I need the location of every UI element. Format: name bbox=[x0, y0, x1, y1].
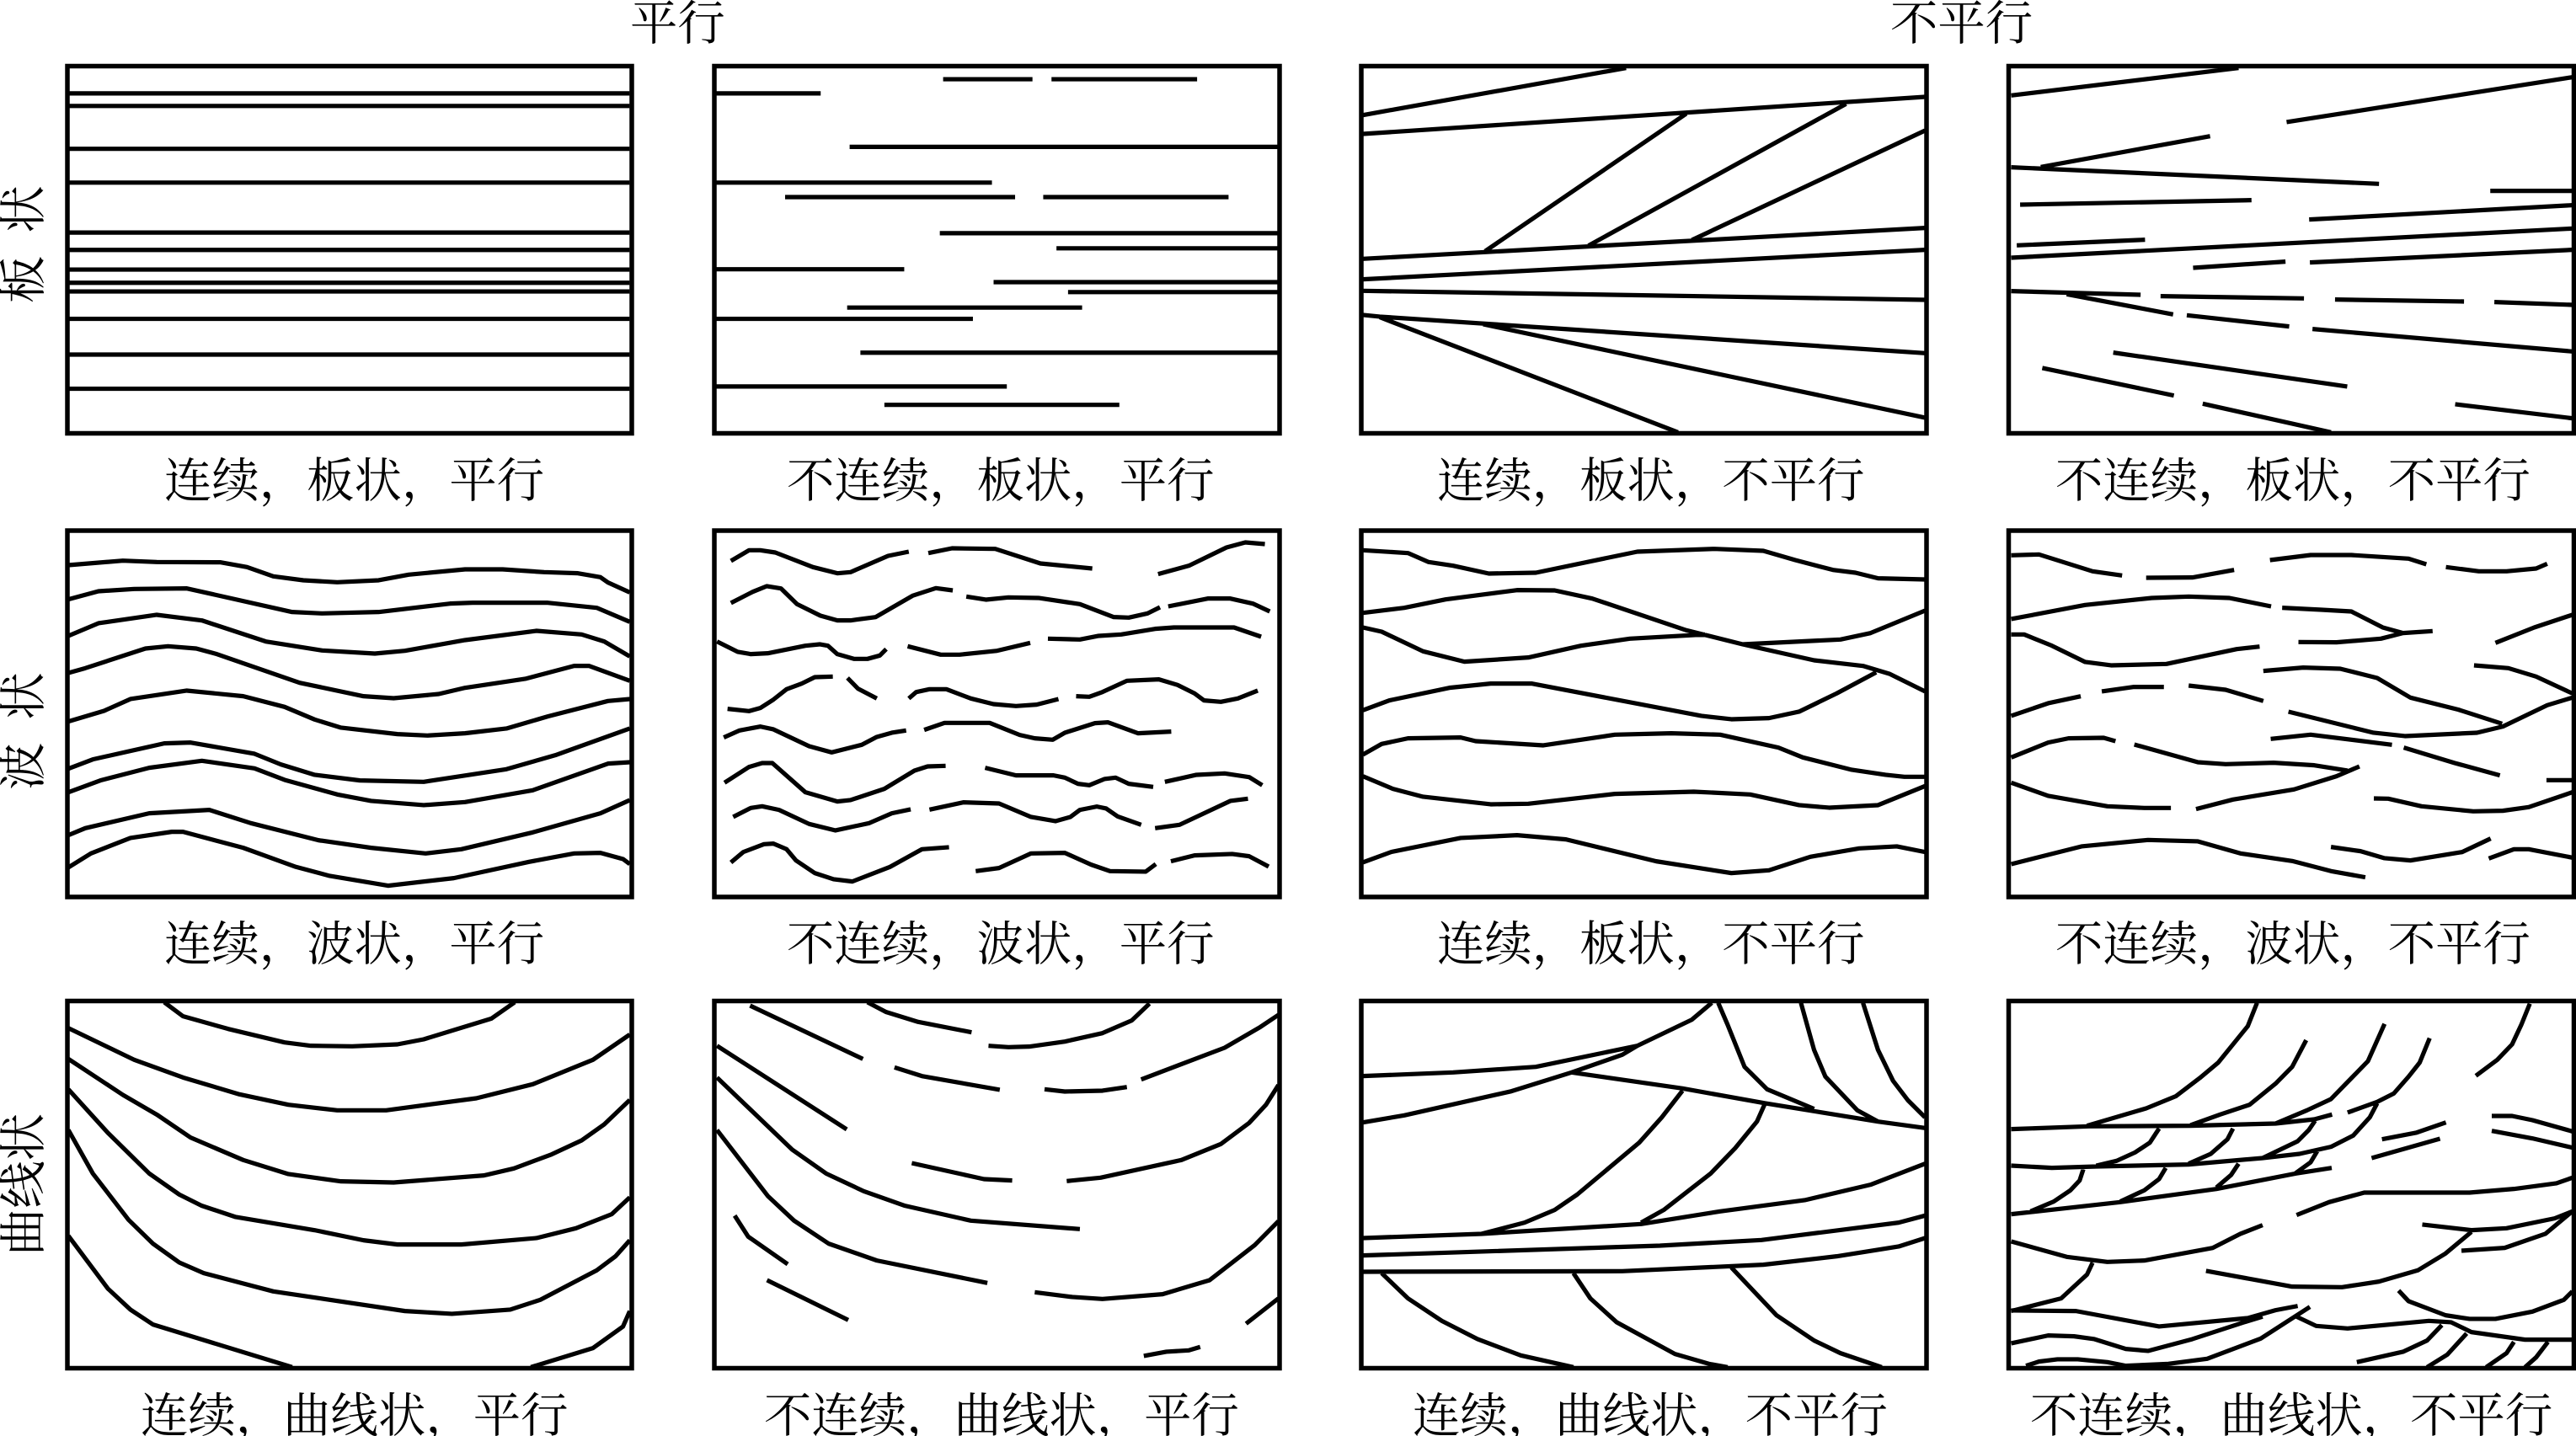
frame bbox=[714, 1001, 1280, 1368]
strata lines bbox=[717, 1002, 1279, 1356]
strata lines bbox=[717, 542, 1269, 882]
frame bbox=[2008, 66, 2574, 433]
panel: continuous wavy non-parallel bbox=[1361, 531, 1927, 897]
strata lines bbox=[1363, 68, 1925, 432]
strata lines bbox=[2012, 68, 2573, 432]
frame bbox=[714, 531, 1280, 897]
frame bbox=[2008, 1001, 2574, 1368]
panel: continuous curved parallel bbox=[67, 1001, 632, 1368]
panel: continuous curved non-parallel bbox=[1361, 1001, 1927, 1368]
strata lines bbox=[716, 79, 1278, 405]
strata lines bbox=[68, 561, 630, 886]
frame bbox=[67, 531, 632, 897]
caption: 不连续，板状，平行 bbox=[787, 456, 1215, 508]
panel: discontinuous curved parallel bbox=[714, 1001, 1280, 1368]
panel: discontinuous tabular parallel bbox=[714, 66, 1280, 433]
caption: 连续，板状，平行 bbox=[164, 456, 544, 508]
frame bbox=[67, 1001, 632, 1368]
strata lines bbox=[2012, 1003, 2573, 1367]
strata lines bbox=[1363, 549, 1925, 873]
panel: continuous tabular parallel bbox=[67, 66, 632, 433]
panel: discontinuous wavy parallel bbox=[714, 531, 1280, 897]
frame bbox=[714, 66, 1280, 433]
frame bbox=[67, 66, 632, 433]
panel: continuous tabular non-parallel bbox=[1361, 66, 1927, 433]
frame bbox=[1361, 531, 1927, 897]
frame bbox=[1361, 66, 1927, 433]
strata lines bbox=[68, 1002, 630, 1367]
caption: 不连续，波状，平行 bbox=[787, 919, 1215, 971]
panel: discontinuous curved non-parallel bbox=[2008, 1001, 2574, 1368]
panel: discontinuous tabular non-parallel bbox=[2008, 66, 2574, 433]
strata lines bbox=[68, 93, 629, 389]
caption: 连续，波状，平行 bbox=[164, 919, 544, 971]
strata lines bbox=[1363, 1003, 1925, 1367]
panel: continuous wavy parallel bbox=[67, 531, 632, 897]
strata lines bbox=[2012, 554, 2573, 878]
caption: 连续，板状，不平行 bbox=[1437, 919, 1865, 971]
caption: 不连续，波状，不平行 bbox=[2055, 919, 2531, 971]
caption: 不连续，板状，不平行 bbox=[2055, 456, 2531, 508]
panel: discontinuous wavy non-parallel bbox=[2008, 531, 2574, 897]
caption: 连续，板状，不平行 bbox=[1437, 456, 1865, 508]
frame bbox=[2008, 531, 2574, 897]
frame bbox=[1361, 1001, 1927, 1368]
